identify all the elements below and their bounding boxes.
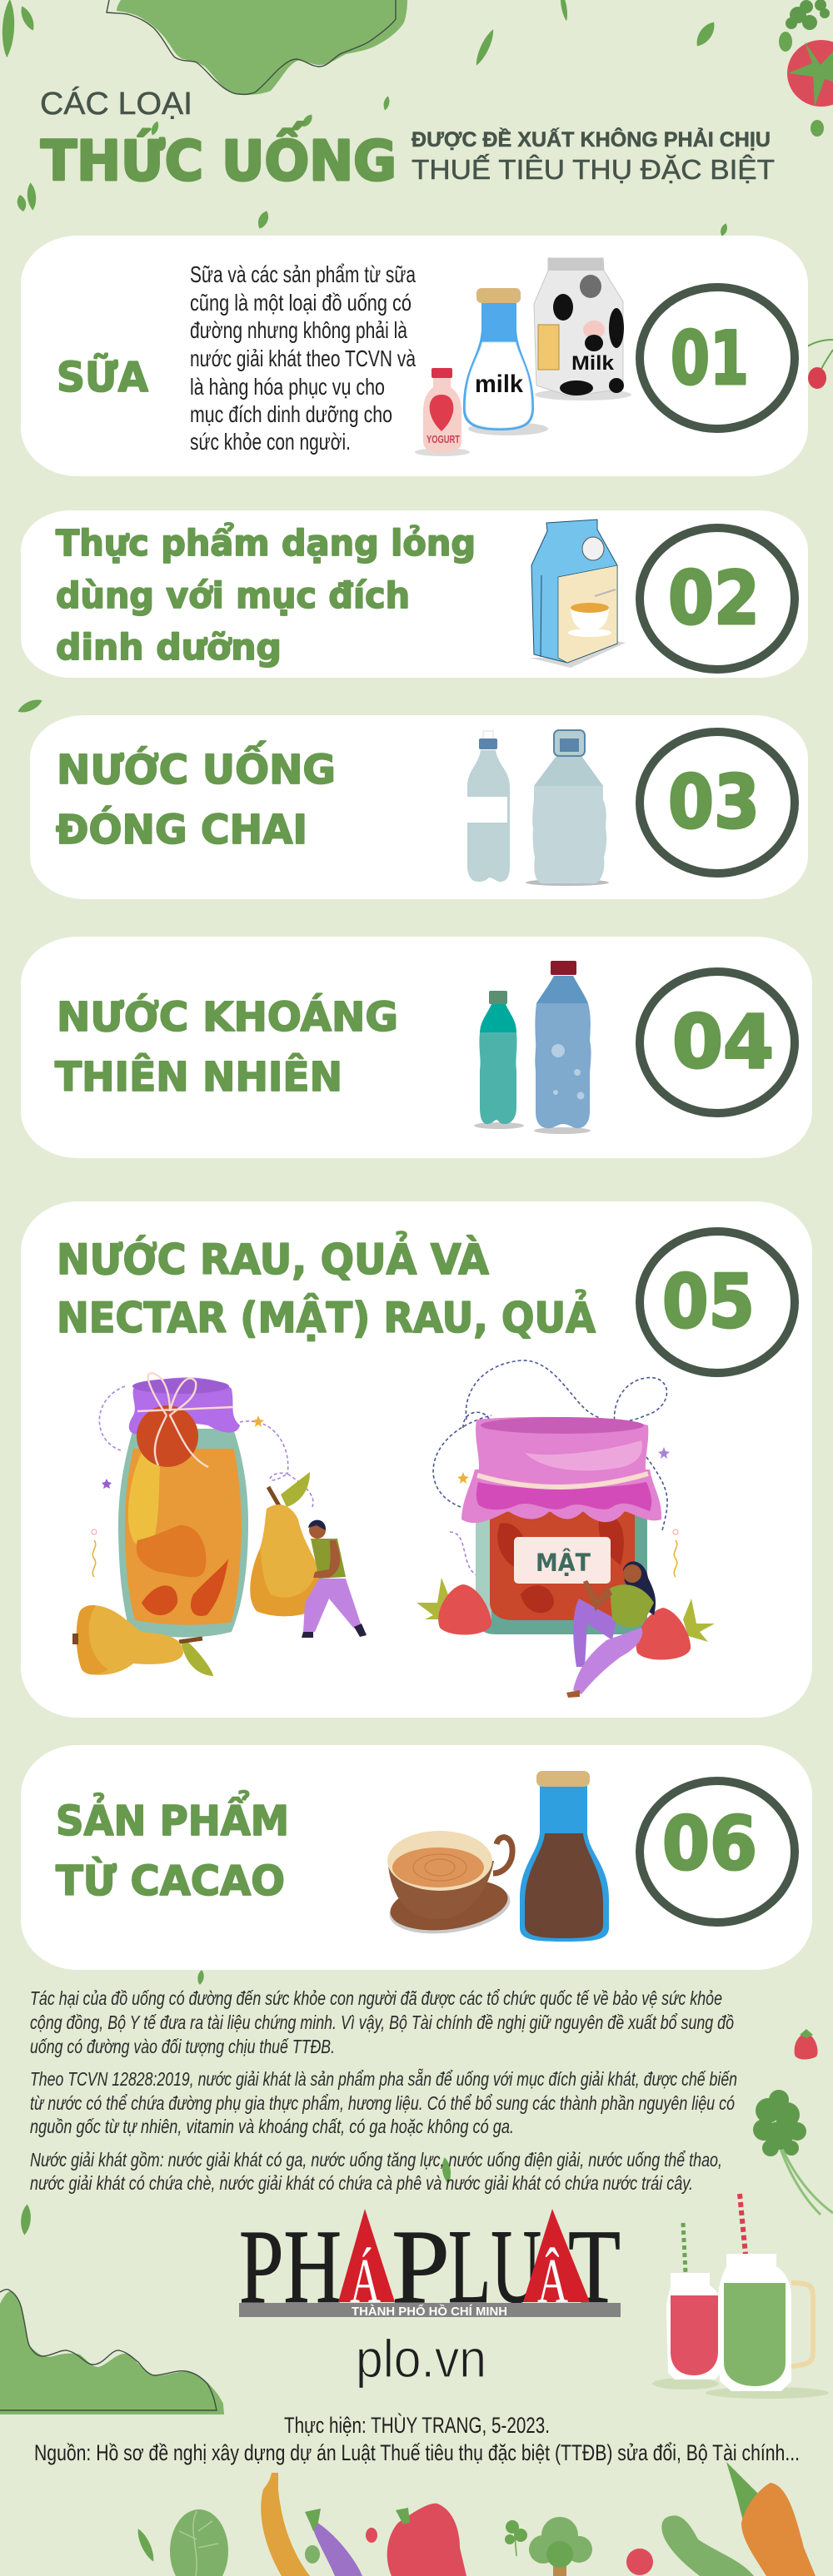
illustration: honey jam jar xyxy=(433,1360,678,1634)
broccoli xyxy=(529,2517,592,2576)
heading xyxy=(56,522,476,669)
heading xyxy=(56,741,336,853)
logo: pháp luật: THÀNH PHỐ HỒ CHÍ MINH xyxy=(352,2304,507,2319)
illustration: strawberries xyxy=(416,1578,715,1660)
footnote text: uống có đường vào đối tượng chịu thuế TTĐB. xyxy=(30,2036,335,2057)
heading xyxy=(55,993,398,1101)
title xyxy=(40,86,775,193)
icon: milk carton xyxy=(534,258,631,400)
illustration: lying pear xyxy=(72,1605,213,1676)
logo: pháp luật: Ậ xyxy=(537,2246,568,2316)
icon: cacao bottle xyxy=(520,1771,609,1942)
body text: mục đích dinh dưỡng cho xyxy=(190,401,392,427)
illustration: standing pear and man xyxy=(250,1472,367,1638)
number badge 03 xyxy=(640,732,795,873)
body text: Sữa và các sản phẩm từ sữa xyxy=(190,261,416,287)
heading: dùng với mục đích xyxy=(56,575,410,617)
number badge 01 xyxy=(640,287,795,429)
icon: teal bottle xyxy=(474,991,524,1129)
scattered leaves xyxy=(1,0,729,2235)
logo: pháp luật xyxy=(239,2209,621,2325)
title line 1: CÁC LOẠI xyxy=(40,86,192,122)
heading: SẢN PHẨM xyxy=(56,1789,289,1845)
banana xyxy=(261,2473,310,2576)
cilantro xyxy=(505,2520,527,2556)
heading: sữa: SỮA xyxy=(57,352,148,401)
cherries xyxy=(789,340,833,389)
number badge 06: 06 xyxy=(662,1801,757,1887)
heading: THIÊN NHIÊN xyxy=(55,1053,342,1101)
illustration: seated woman xyxy=(566,1561,656,1698)
panel: 06 sản phẩm từ cacao xyxy=(21,1745,812,1970)
logo: pháp luật: Á xyxy=(350,2246,381,2316)
eggplant xyxy=(305,2509,362,2576)
cherry xyxy=(366,2528,377,2543)
body text: sức khỏe con người. xyxy=(190,429,351,455)
body text: là hàng hóa phục vụ cho xyxy=(190,374,385,400)
carrot xyxy=(741,2483,816,2576)
icon: milk bottle xyxy=(463,288,548,435)
number badge 06 xyxy=(640,1781,795,1922)
number badge 03: 03 xyxy=(668,759,760,845)
pea xyxy=(305,2545,320,2564)
panel: 05 nước rau quả xyxy=(21,1201,812,1718)
icon: yogurt bottle xyxy=(415,368,470,456)
footnote text: nguồn gốc từ tự nhiên, vitamin và khoáng chất, có ga hoặc không có ga. xyxy=(30,2116,514,2137)
footnote text xyxy=(30,1987,737,2194)
number badge 05: 05 xyxy=(662,1259,755,1345)
cucumber xyxy=(661,2515,754,2576)
peas xyxy=(779,32,824,137)
heading xyxy=(57,1231,596,1342)
number badge 04: 04 xyxy=(672,999,774,1085)
panel: 01 sữa xyxy=(21,236,808,476)
heading xyxy=(56,1789,289,1905)
subtitle line 1: ĐƯỢC ĐỀ XUẤT KHÔNG PHẢI CHỊU xyxy=(412,127,771,152)
asparagus xyxy=(726,2462,762,2531)
illustration: honey jam jar: MẬT xyxy=(536,1549,591,1577)
heading: NƯỚC KHOÁNG xyxy=(57,993,398,1041)
tomato top right xyxy=(787,40,833,107)
number badge 04 xyxy=(640,972,795,1113)
icon: cup of cacao xyxy=(387,1831,513,1941)
website: plo.vn xyxy=(356,2329,486,2389)
logo: pháp luật: T xyxy=(568,2209,621,2325)
hill bottom left xyxy=(0,2290,224,2414)
title main: THỨC UỐNG xyxy=(41,122,397,193)
heading: NƯỚC RAU, QUẢ VÀ xyxy=(57,1231,489,1284)
number badge 05 xyxy=(640,1231,795,1373)
vegetables row xyxy=(134,2462,816,2576)
body text: đường nhưng không phải là xyxy=(190,317,408,343)
heading: TỪ CACAO xyxy=(56,1856,285,1905)
panel: 04 nước khoáng thiên nhiên xyxy=(21,937,812,1158)
icon: soup carton xyxy=(530,520,626,668)
subtitle line 2: THUẾ TIÊU THỤ ĐẶC BIỆT xyxy=(412,154,775,185)
body text: nước giải khát theo TCVN và xyxy=(190,346,416,371)
top blob decoration xyxy=(107,0,407,95)
panel: 02 thực phẩm dạng lỏng xyxy=(21,510,808,678)
logo: pháp luật: P xyxy=(392,2209,450,2325)
number badge 02 xyxy=(640,528,795,669)
icon: milk carton: Milk xyxy=(571,352,615,375)
panel: 03 nước uống đóng chai xyxy=(30,715,808,899)
heading: NECTAR (MẬT) RAU, QUẢ xyxy=(57,1289,596,1342)
heading: NƯỚC UỐNG xyxy=(57,741,336,793)
author: Thực hiện: THÙY TRANG, 5-2023. xyxy=(284,2412,550,2438)
strawberry right xyxy=(795,2029,818,2060)
icon: milk bottle: milk xyxy=(475,370,523,398)
icon: large water bottle xyxy=(526,730,609,886)
illustration: pear juice jar xyxy=(92,1373,313,1638)
number badge 02: 02 xyxy=(668,555,760,641)
heading: ĐÓNG CHAI xyxy=(56,806,307,853)
logo: pháp luật: LU xyxy=(448,2209,541,2325)
icon: small water bottle xyxy=(467,731,510,882)
heading: dinh dưỡng xyxy=(56,627,282,669)
cabbage xyxy=(170,2509,228,2576)
number badge 01: 01 xyxy=(671,316,749,401)
icon: yogurt bottle: YOGURT xyxy=(426,433,460,445)
cilantro right xyxy=(753,2090,833,2215)
body text: cũng là một loại đồ uống có xyxy=(190,290,412,316)
heading: Thực phẩm dạng lỏng xyxy=(56,522,476,564)
leaf xyxy=(134,2527,157,2564)
credits xyxy=(34,2412,800,2465)
body text xyxy=(190,261,416,455)
logo: pháp luật: PH xyxy=(239,2209,342,2325)
juice jars xyxy=(652,2194,829,2399)
red bell pepper xyxy=(387,2504,466,2576)
icon: blue bottle xyxy=(534,961,591,1134)
cilantro top right xyxy=(786,0,830,30)
red tomato xyxy=(626,2549,653,2575)
